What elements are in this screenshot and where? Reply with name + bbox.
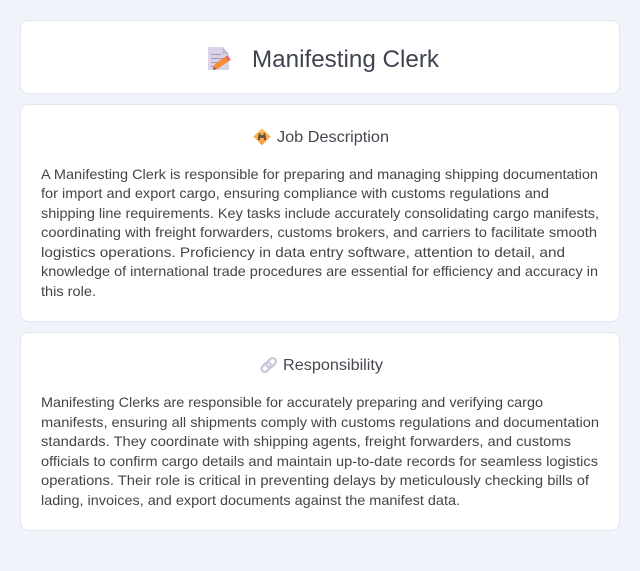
job description text: shipping line requirements. Key tasks include accurately consolidating cargo manifests, xyxy=(41,205,599,221)
job description text: coordinating with freight forwarders, customs brokers, and carriers to facilitate smooth xyxy=(41,224,597,240)
icon: road sign xyxy=(254,129,270,144)
heading: responsibility: Responsibility xyxy=(283,357,383,374)
responsibility text: Manifesting Clerks are responsible for accurately preparing and verifying cargo xyxy=(41,394,543,410)
panel: job description xyxy=(20,104,620,322)
icon: chain link xyxy=(260,357,277,373)
responsibility text: manifests, ensuring all shipments comply with customs regulations and documentation xyxy=(41,414,599,430)
responsibility text: officials to confirm cargo details and maintain up-to-date records for seamless logistics xyxy=(41,453,598,469)
responsibility text xyxy=(41,394,599,508)
heading: job description: Job Description xyxy=(277,129,389,146)
job description text: for import and export cargo, ensuring compliance with customs regulations and xyxy=(41,185,549,201)
title text: Manifesting Clerk xyxy=(252,46,440,73)
panel: responsibility xyxy=(20,332,620,530)
responsibility text: operations. Their role is critical in preventing delays by meticulously checking bills of xyxy=(41,472,589,488)
icon: document with pencil xyxy=(208,47,231,70)
job description text: knowledge of international trade procedures are essential for efficiency and accuracy in xyxy=(41,263,598,279)
panel: title xyxy=(20,20,620,94)
job description text: logistics operations. Proficiency in data entry software, attention to detail, and xyxy=(41,244,565,260)
job description text: A Manifesting Clerk is responsible for preparing and managing shipping documentation xyxy=(41,166,598,182)
responsibility text: standards. They coordinate with shipping agents, freight forwarders, and customs xyxy=(41,433,571,449)
responsibility text: lading, invoices, and export documents against the manifest data. xyxy=(41,492,460,508)
job description text xyxy=(41,166,599,299)
job description text: this role. xyxy=(41,283,96,299)
